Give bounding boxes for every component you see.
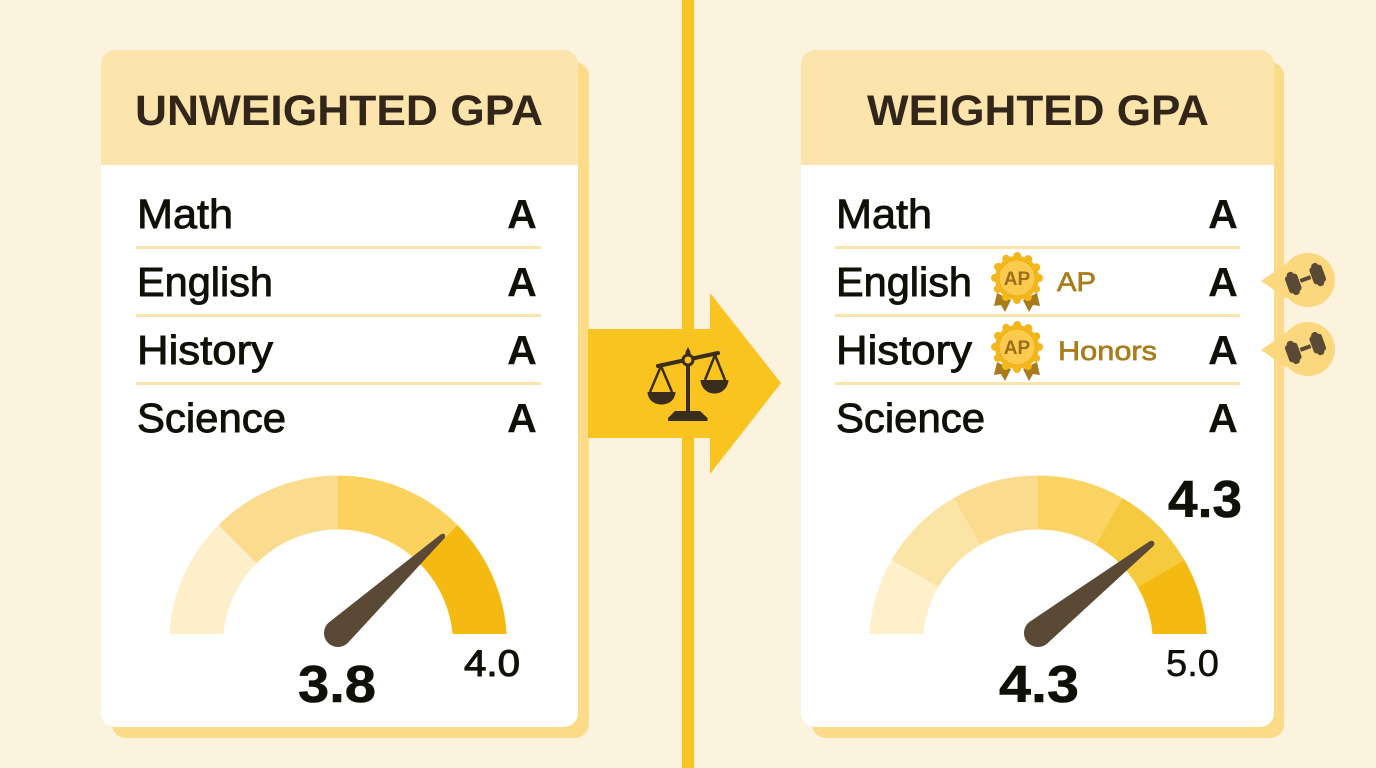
row: english: A xyxy=(1208,259,1238,305)
row: math xyxy=(137,191,537,237)
row: english xyxy=(137,259,537,305)
row: science: Science xyxy=(836,395,985,441)
row: science: A xyxy=(1208,395,1238,441)
panel shadow xyxy=(112,62,589,738)
row: science xyxy=(137,395,537,441)
row: science: A xyxy=(507,395,537,441)
panel header band xyxy=(801,50,1274,165)
icon: AP badge on History xyxy=(994,325,1040,381)
icon: AP badge on English: AP xyxy=(1004,269,1031,290)
gauge: weighted 4.3 of 5.0 xyxy=(869,471,1242,714)
panel: weighted GPA xyxy=(801,50,1335,738)
panel: unweighted GPA xyxy=(101,50,589,738)
heading: unweighted GPA: UNWEIGHTED GPA xyxy=(135,87,543,135)
row: history xyxy=(137,327,537,373)
icon: AP badge on English xyxy=(994,256,1040,312)
panel shadow xyxy=(812,62,1284,738)
grade rows xyxy=(136,191,541,441)
grade rows xyxy=(835,191,1240,441)
center divider line xyxy=(682,0,694,768)
row: math: A xyxy=(1208,191,1238,237)
gauge value near needle: 4.3 xyxy=(1168,471,1242,529)
row: math: Math xyxy=(836,191,932,237)
icon: balance scales xyxy=(648,347,728,421)
gauge: unweighted 3.8 of 4.0 xyxy=(169,476,520,714)
gauge maximum: 5.0 xyxy=(1166,643,1219,684)
panel card xyxy=(801,50,1274,727)
label: Honors: Honors xyxy=(1058,336,1157,366)
panel card xyxy=(101,50,578,727)
gauge needle xyxy=(324,534,445,647)
panel header band xyxy=(101,50,578,165)
callout: dumbbell on English xyxy=(1261,253,1335,307)
row: math: A xyxy=(507,191,537,237)
icon: AP badge on History: AP xyxy=(1004,338,1031,359)
label: AP: AP xyxy=(1057,267,1096,297)
row: science: Science xyxy=(137,395,286,441)
row: math xyxy=(836,191,1238,237)
row: english: English xyxy=(137,259,273,305)
row: english: A xyxy=(507,259,537,305)
arrow: unweighted to weighted xyxy=(588,293,781,474)
row: english: English xyxy=(836,259,972,305)
row: english xyxy=(836,259,1238,305)
row: history xyxy=(836,327,1238,373)
row: history: History xyxy=(836,327,973,373)
row: history: A xyxy=(1208,327,1238,373)
gauge needle xyxy=(1024,541,1154,647)
row: math: Math xyxy=(137,191,233,237)
gauge value: 3.8 xyxy=(298,656,376,714)
gauge value: 4.3 xyxy=(999,656,1079,714)
callout: dumbbell on History xyxy=(1261,322,1335,376)
row: history: History xyxy=(137,327,274,373)
gauge maximum: 4.0 xyxy=(464,643,520,684)
gauge segments xyxy=(169,476,507,644)
heading: weighted GPA: WEIGHTED GPA xyxy=(867,87,1209,135)
row: science xyxy=(836,395,1238,441)
row: history: A xyxy=(507,327,537,373)
gauge segments xyxy=(869,475,1207,644)
